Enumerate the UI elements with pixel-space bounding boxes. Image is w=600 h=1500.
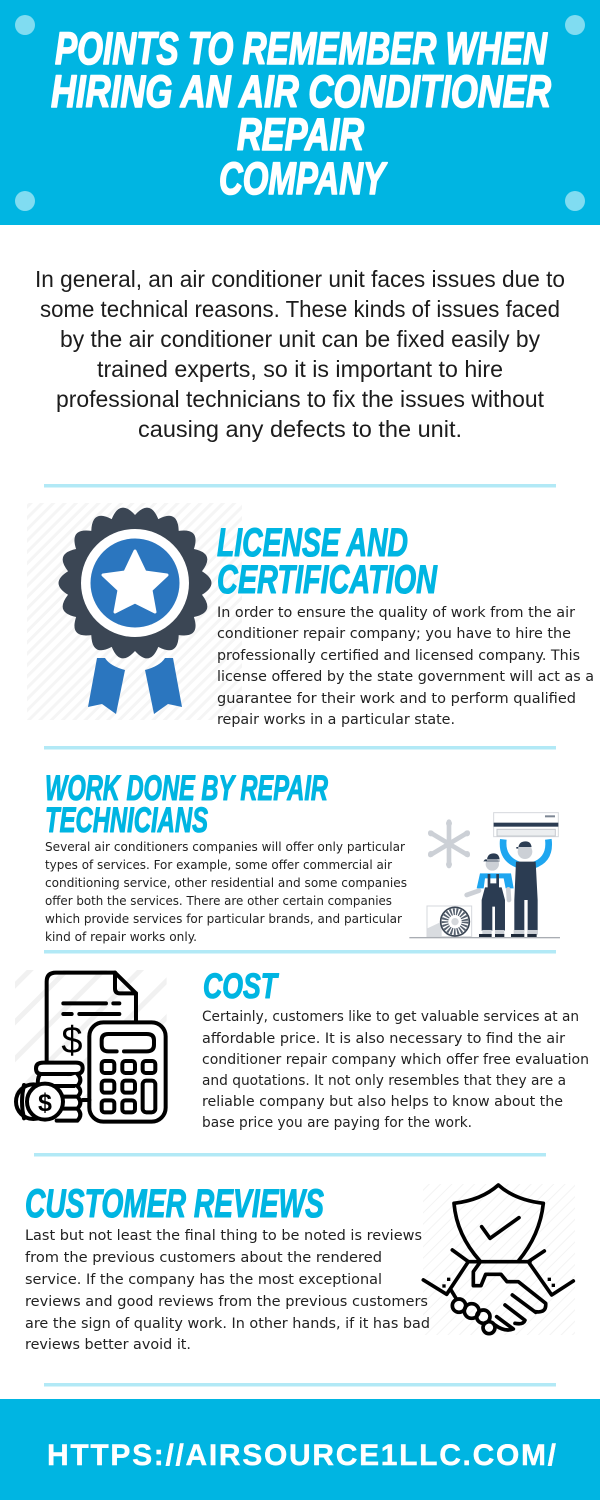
heading [45,769,328,840]
title: REPAIR [237,109,364,160]
body text: guarantee for their work and to perform qualified [217,691,576,707]
website url: HTTPS://AIRSOURCE1LLC.COM/ [47,1439,557,1472]
body text: conditioning service, other residential and some companies [45,875,407,890]
icon: dollar signs: $ [38,1089,52,1117]
intro paragraph: causing any defects to the unit. [138,416,462,442]
heading: TECHNICIANS [45,801,208,840]
body text: license offered by the state government will act as a [217,669,594,685]
body text: reviews and good reviews from the previous customers [25,1294,428,1310]
title: COMPANY [219,153,388,204]
body text: Several air conditioners companies will offer only particular [45,839,406,854]
body text: and quotations. It not only resembles that they are a [202,1073,566,1089]
body text: Certainly, customers like to get valuable services at an [202,1009,579,1025]
icon: dollar signs [38,1020,83,1117]
heading: LICENSE AND [217,521,408,565]
icon: invoice, calculator and coins [15,970,167,1122]
body text [45,839,407,944]
icon: shield and handshake [423,1184,575,1335]
icon: award badge [27,503,242,720]
body text: In order to ensure the quality of work from the air [217,605,575,621]
corner dots [15,15,585,211]
panel: work done by repair technicians [45,769,560,944]
body text: which provide services for particular brands, and particular [45,911,403,926]
body text: base price you are paying for the work. [202,1115,472,1131]
intro paragraph: trained experts, so it is important to hire [97,356,503,382]
body text [217,605,594,728]
body text: types of services. For example, some offer commercial air [45,857,393,872]
body text: affordable price. It is also necessary to find the air [202,1031,565,1047]
body text: conditioner repair company which offer free evaluation [202,1052,589,1068]
intro paragraph: by the air conditioner unit can be fixed easily by [60,326,540,352]
body text: conditioner repair company; you have to hire the [217,626,571,642]
body text: repair works in a particular state. [217,712,455,728]
body text: professionally certified and licensed company. This [217,648,580,664]
heading: CUSTOMER REVIEWS [25,1182,324,1226]
intro paragraph [35,266,565,442]
intro paragraph: professional technicians to fix the issues without [56,386,545,412]
body text: Last but not least the final thing to be noted is reviews [25,1228,422,1244]
header banner [0,0,600,225]
body text: are the sign of quality work. In other hands, if it has bad [25,1316,430,1332]
icon: technicians installing air conditioner [409,813,560,938]
heading: COST [203,967,279,1006]
title [51,23,551,204]
intro paragraph: In general, an air conditioner unit faces issues due to [35,266,565,292]
icon: dollar signs: $ [61,1020,83,1062]
footer banner [0,1399,600,1500]
body text: kind of repair works only. [45,929,197,944]
body text: reviews better avoid it. [25,1337,191,1353]
panel: license and certification [27,503,594,728]
body text [202,1009,589,1131]
heading [217,521,438,602]
body text: reliable company but also helps to know about the [202,1094,563,1110]
heading: WORK DONE BY REPAIR [45,769,328,808]
body text: offer both the services. There are other certain companies [45,893,392,908]
panel: cost [15,967,589,1131]
body text: from the previous customers about the rendered [25,1250,382,1266]
panel: customer reviews [25,1182,575,1353]
intro paragraph: some technical reasons. These kinds of issues faced [40,296,560,322]
body text [25,1228,430,1353]
body text: service. If the company has the most exceptional [25,1272,382,1288]
heading: CERTIFICATION [217,558,438,602]
